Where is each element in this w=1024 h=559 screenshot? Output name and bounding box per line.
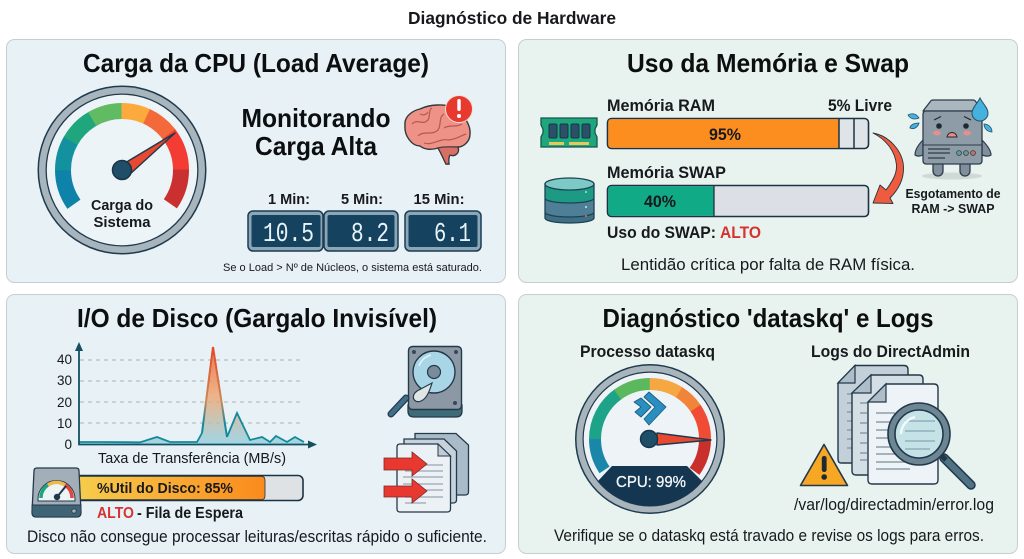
icon: brain with alert: [405, 96, 472, 164]
heading: monitoring high load: [242, 103, 390, 161]
subheading: process: Processo dataskq: [580, 343, 715, 361]
icon: sad sweating server: [908, 98, 992, 180]
heading: disk: I/O de Disco (Gargalo Invisível): [77, 303, 437, 333]
gauge: dataskq CPU: CPU: 99%: [616, 474, 686, 491]
RAM usage bar: [607, 97, 892, 148]
status: queue: ALTO: [97, 505, 134, 522]
icon: hard disk with magnifier: [391, 346, 462, 417]
SWAP usage bar: [607, 164, 868, 216]
load values: 15 minutes: 6.1: [434, 220, 471, 250]
disk utilisation bar: [70, 476, 303, 500]
RAM usage bar: 95%: [709, 126, 741, 144]
panel: dataskq and logs: [518, 294, 1018, 554]
panel: disk I/O: [6, 294, 506, 554]
icon: dataskq logo: [634, 392, 666, 425]
icon: RAM module: [541, 118, 597, 147]
load values: 15 minutes: [405, 192, 481, 251]
heading: CPU load: Carga da CPU (Load Average): [83, 48, 429, 78]
icon: log documents with magnifier and warning: [800, 366, 971, 486]
load values: 5 minutes: 8.2: [351, 220, 389, 250]
load values: 5 minutes: 5 Min:: [341, 192, 383, 208]
note: check dataskq: Verifique se o dataskq está travado e revise os logs para erros.: [554, 527, 984, 545]
panel background: CPU load: [6, 40, 506, 282]
load values: 5 minutes: [324, 192, 398, 251]
note: critical slowness: Lentidão crítica por falta de RAM física.: [621, 255, 915, 274]
label: RAM exhaustion: RAM -> SWAP: [912, 202, 994, 216]
main title: Diagnóstico de Hardware: [408, 8, 616, 28]
line chart: transfer rate: Taxa de Transferência (MB/s): [98, 451, 286, 467]
line chart: transfer rate: 10: [57, 416, 72, 431]
note: disk cannot keep up: Disco não consegue processar leituras/escritas rápido o suficiente.: [27, 528, 487, 546]
load values: 1 minute: 1 Min:: [268, 192, 310, 208]
label: RAM exhaustion: Esgotamento de: [906, 187, 1001, 201]
panel: CPU load: [6, 40, 506, 282]
heading: monitoring high load: Monitorando: [242, 103, 390, 133]
swap status: Uso do SWAP:: [607, 224, 716, 242]
line chart: transfer rate: 40: [57, 352, 72, 367]
RAM usage bar: Memória RAM: [607, 97, 715, 115]
gauge: system load: Carga do: [91, 198, 153, 214]
status: queue: - Fila de Espera: [137, 505, 243, 522]
note: saturation: Se o Load > Nº de Núcleos, o sistema está saturado.: [223, 262, 482, 274]
line chart: transfer rate: 30: [57, 373, 72, 388]
subheading: logs: Logs do DirectAdmin: [811, 343, 970, 361]
load values: 1 minute: 10.5: [263, 220, 314, 250]
gauge: system load: Sistema: [94, 215, 151, 231]
line chart: transfer rate: 0: [64, 437, 72, 452]
load values: 15 minutes: 15 Min:: [414, 192, 464, 208]
icon: database storage: [545, 178, 594, 223]
disk utilisation bar: %Util do Disco: 85%: [97, 480, 233, 497]
label: log path: /var/log/directadmin/error.log: [794, 496, 994, 514]
heading: memory: Uso da Memória e Swap: [627, 48, 909, 78]
heading: monitoring high load: Carga Alta: [255, 131, 378, 161]
gauge: system load: [38, 86, 206, 254]
heading: diagnostics: Diagnóstico 'dataskq' e Logs: [602, 303, 934, 333]
icon: documents with arrows: [384, 434, 468, 512]
icon: disk gauge: [32, 468, 81, 517]
panel: memory and swap: [518, 40, 1018, 282]
arrow: RAM to SWAP: [873, 133, 904, 204]
SWAP usage bar: Memória SWAP: [607, 164, 726, 182]
status: queue: [97, 505, 243, 522]
label: RAM exhaustion: [906, 187, 1001, 216]
panel background: memory: [518, 40, 1018, 282]
line chart: transfer rate: 20: [57, 395, 72, 410]
line chart: transfer rate: [57, 342, 317, 467]
swap status: ALTO: [720, 224, 761, 242]
RAM usage bar: 5% Livre: [828, 97, 892, 115]
panel background: diagnostics: [518, 294, 1018, 554]
panel background: disk: [6, 294, 506, 554]
gauge: dataskq CPU: [573, 362, 727, 516]
load values: 1 minute: [248, 192, 323, 251]
SWAP usage bar: 40%: [644, 193, 676, 211]
